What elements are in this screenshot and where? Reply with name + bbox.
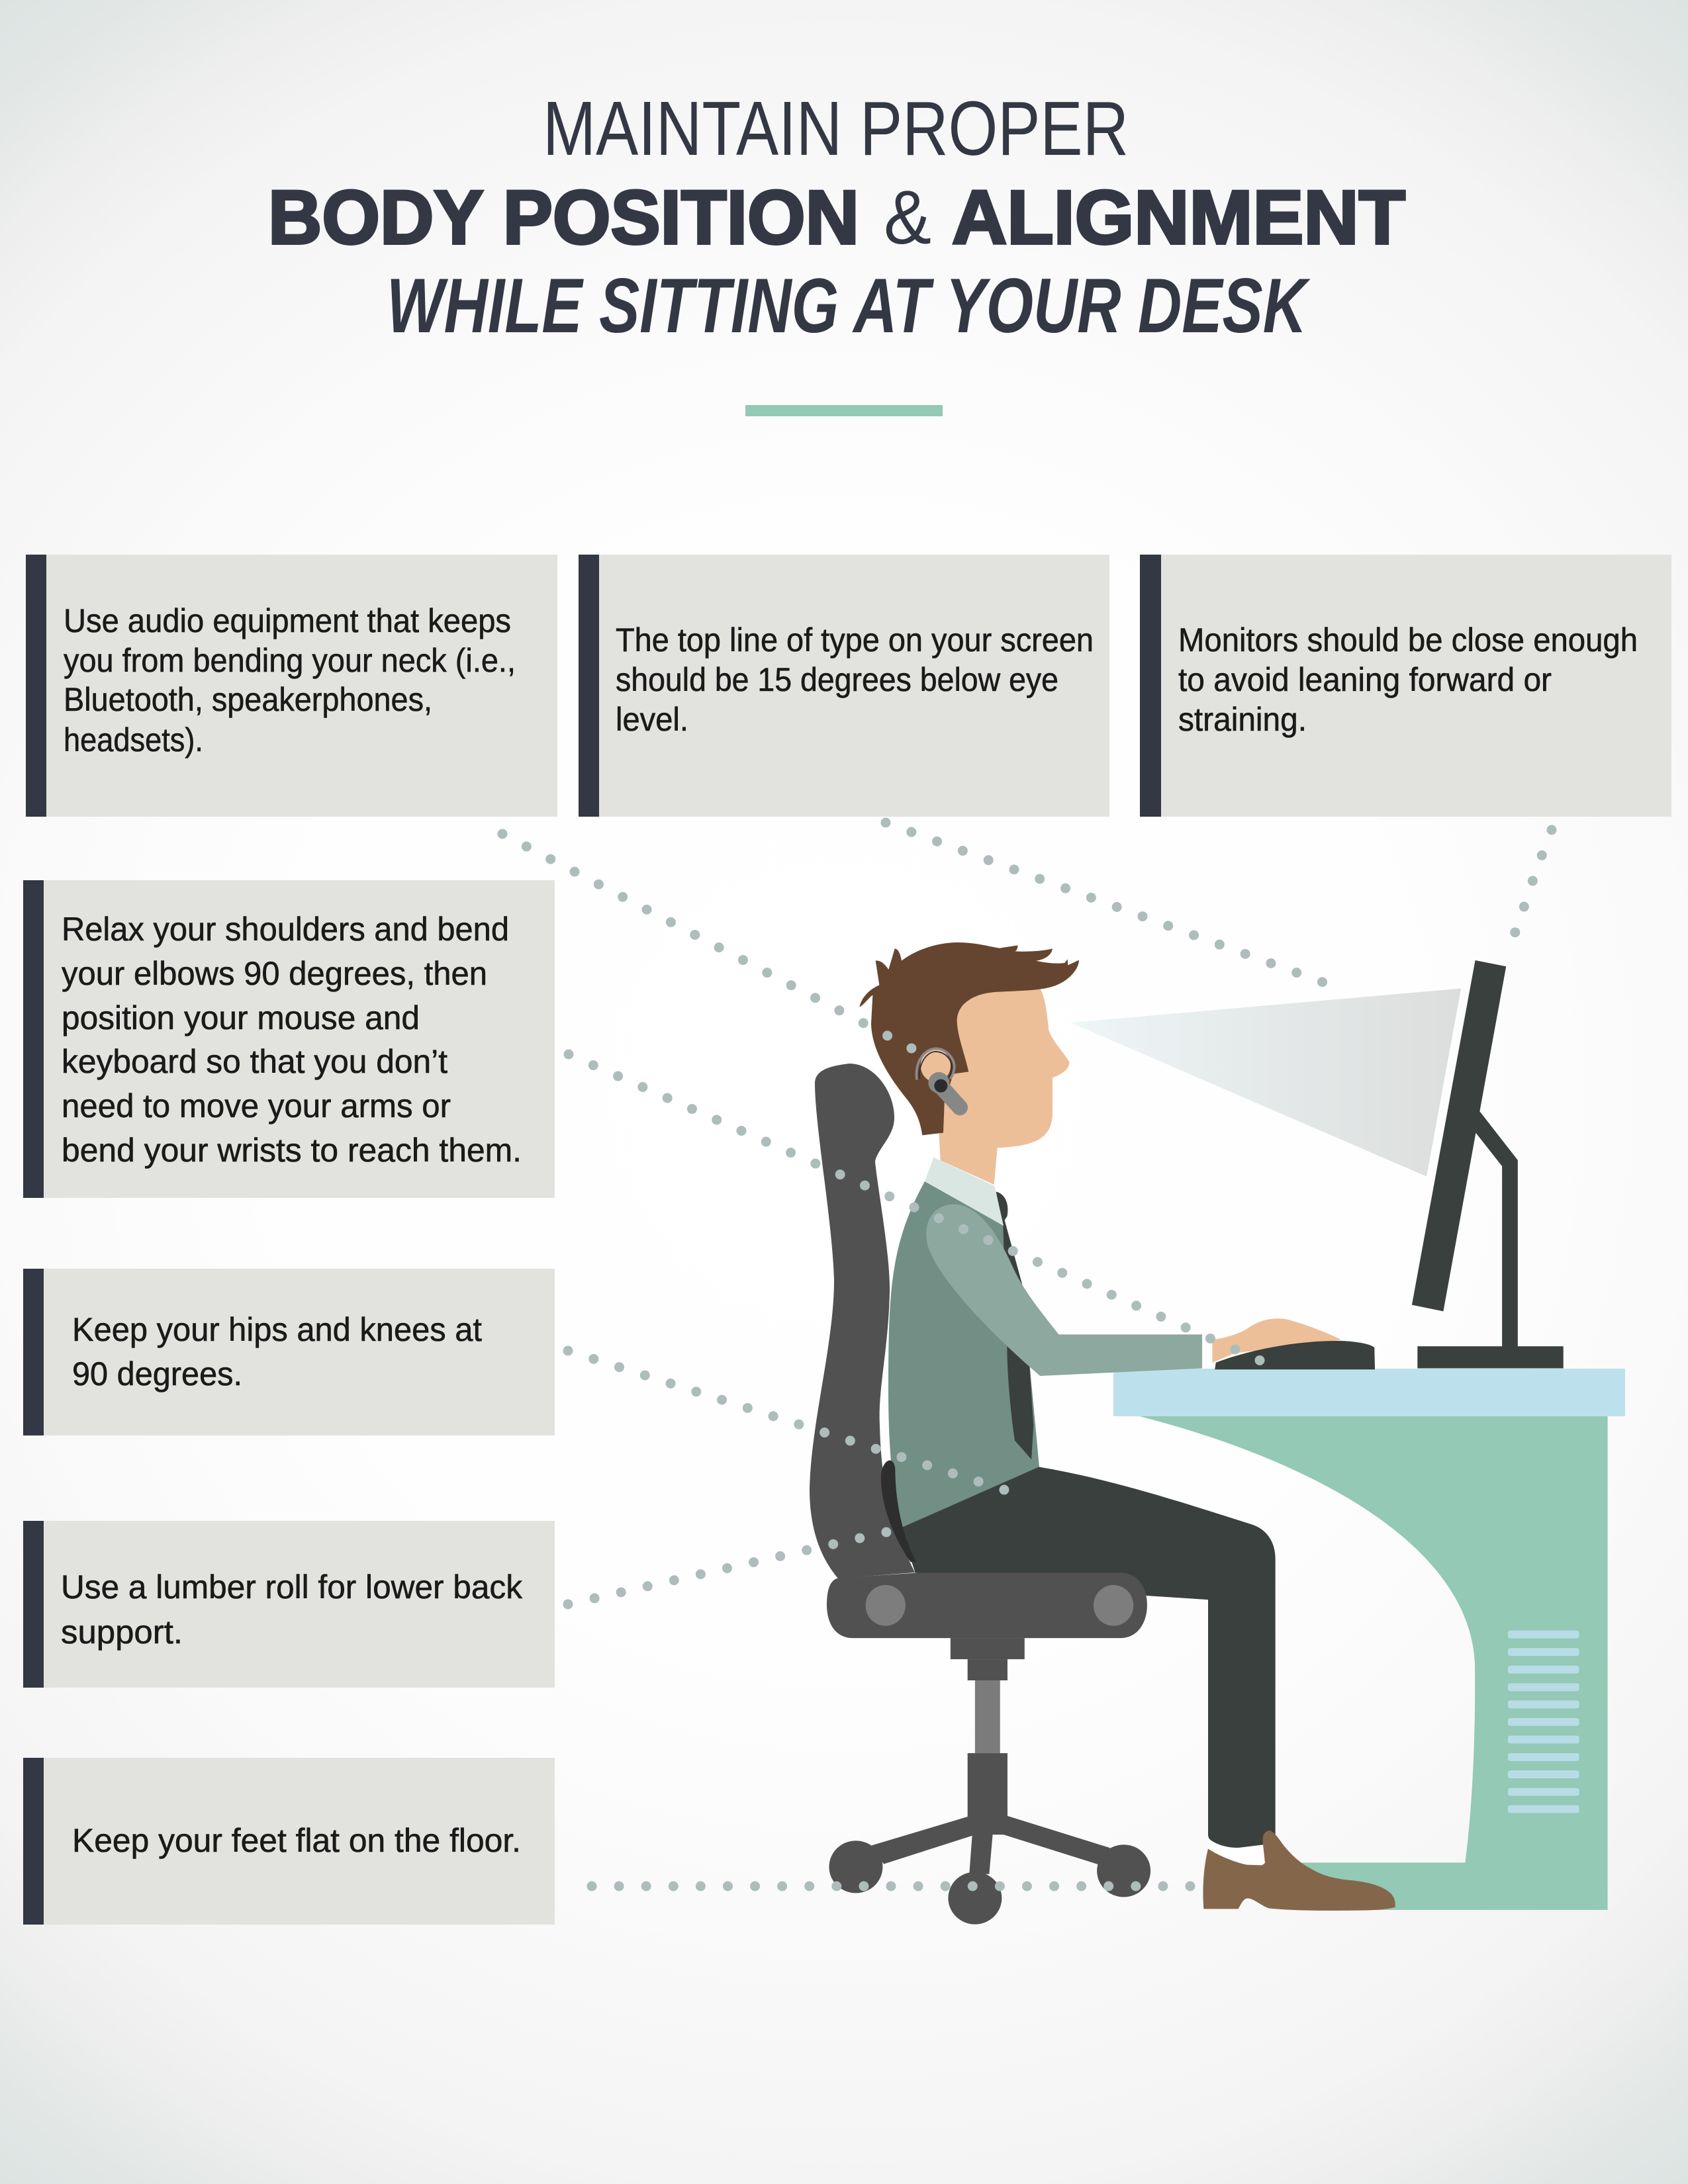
connector: hips	[568, 1351, 1005, 1490]
text: shoulders and elbows: bend your wrists to reach them.	[62, 1132, 522, 1169]
title line 3: WHILE SITTING AT YOUR DESK	[387, 262, 1311, 349]
text: hips and knees: Keep your hips and knees at	[72, 1311, 482, 1348]
desk vents	[1508, 1631, 1579, 1813]
connector: feet	[592, 1881, 1190, 1891]
connector: audio to ear	[502, 834, 912, 1048]
panel: audio equipment	[26, 555, 557, 817]
connector: lumbar	[568, 1532, 887, 1604]
gas lift	[975, 1680, 1000, 1753]
chair legs	[870, 1816, 1110, 1874]
title	[268, 85, 1405, 349]
text: audio equipment: you from bending your neck (i.e.,	[64, 642, 516, 679]
trousers	[901, 1467, 1276, 1848]
chair wheels	[829, 1841, 1150, 1925]
panel: monitor distance	[1140, 555, 1671, 817]
text: feet flat: Keep your feet flat on the floor.	[72, 1822, 521, 1859]
hand	[1212, 1318, 1342, 1363]
title accent bar	[745, 405, 943, 416]
desk	[1113, 1369, 1625, 1910]
text: monitor distance: Monitors should be close enough	[1178, 621, 1638, 659]
text: top line of type: The top line of type on your screen	[616, 621, 1094, 659]
title line 1: MAINTAIN PROPER	[543, 85, 1129, 171]
sock	[1208, 1838, 1265, 1865]
text: audio equipment: headsets).	[64, 721, 203, 758]
text: top line of type	[616, 621, 1094, 738]
text: monitor distance: to avoid leaning forward or	[1178, 661, 1552, 698]
text: monitor distance: straining.	[1178, 701, 1307, 738]
text: shoulders and elbows: your elbows 90 degrees, then	[62, 955, 487, 992]
text: audio equipment: Use audio equipment that keeps	[64, 602, 511, 639]
title line 2: body position: BODY POSITION	[268, 175, 859, 260]
title line 2: ampersand: &	[884, 175, 931, 260]
text: top line of type: should be 15 degrees below eye	[616, 661, 1058, 698]
text: lumbar roll: Use a lumber roll for lower back	[61, 1569, 523, 1606]
icon: bluetooth headset	[917, 1048, 960, 1107]
text: shoulders and elbows: need to move your arms or	[62, 1087, 451, 1124]
connector: top line to screen	[886, 823, 1323, 982]
text: monitor distance	[1178, 621, 1638, 738]
arm	[926, 1205, 1202, 1376]
chair back	[810, 1064, 915, 1578]
vision cone	[1070, 989, 1461, 1177]
hair	[859, 942, 1079, 1135]
panel: lumbar roll	[23, 1521, 555, 1688]
text: lumbar roll: support.	[61, 1614, 183, 1651]
text: shoulders and elbows: keyboard so that you don’t	[62, 1043, 447, 1080]
connector: monitor distance	[1515, 830, 1552, 934]
text: shoulders and elbows: Relax your shoulders and bend	[62, 911, 509, 948]
neck and face	[927, 989, 1070, 1185]
text: shoulders and elbows: position your mouse and	[62, 999, 420, 1036]
panel: shoulders and elbows	[23, 880, 555, 1198]
panel: feet flat	[23, 1758, 555, 1925]
torso	[888, 1181, 1039, 1528]
panel: top line of type	[579, 555, 1109, 817]
panel: hips and knees	[23, 1269, 555, 1435]
lumbar roll	[881, 1461, 916, 1562]
mouse	[1215, 1341, 1375, 1369]
title line 2: alignment: ALIGNMENT	[952, 175, 1405, 260]
seat highlights	[866, 1585, 1133, 1626]
person	[859, 942, 1395, 1911]
monitor	[1412, 960, 1564, 1369]
text: audio equipment	[64, 602, 516, 758]
shoe	[1203, 1831, 1395, 1911]
chair seat and base	[827, 1572, 1150, 1925]
dotted connectors	[502, 823, 1552, 1886]
desk body	[1139, 1416, 1608, 1910]
text: audio equipment: Bluetooth, speakerphones,	[64, 681, 432, 718]
desk top	[1113, 1369, 1625, 1416]
text: hips and knees	[72, 1311, 482, 1392]
tie	[996, 1192, 1033, 1459]
connector: shoulders to hand	[569, 1054, 1260, 1361]
text: lumbar roll	[61, 1569, 523, 1651]
collar	[925, 1158, 1004, 1226]
seat	[827, 1572, 1147, 1638]
text: top line of type: level.	[616, 701, 688, 738]
text: hips and knees: 90 degrees.	[72, 1355, 242, 1392]
text: shoulders and elbows	[62, 911, 522, 1169]
